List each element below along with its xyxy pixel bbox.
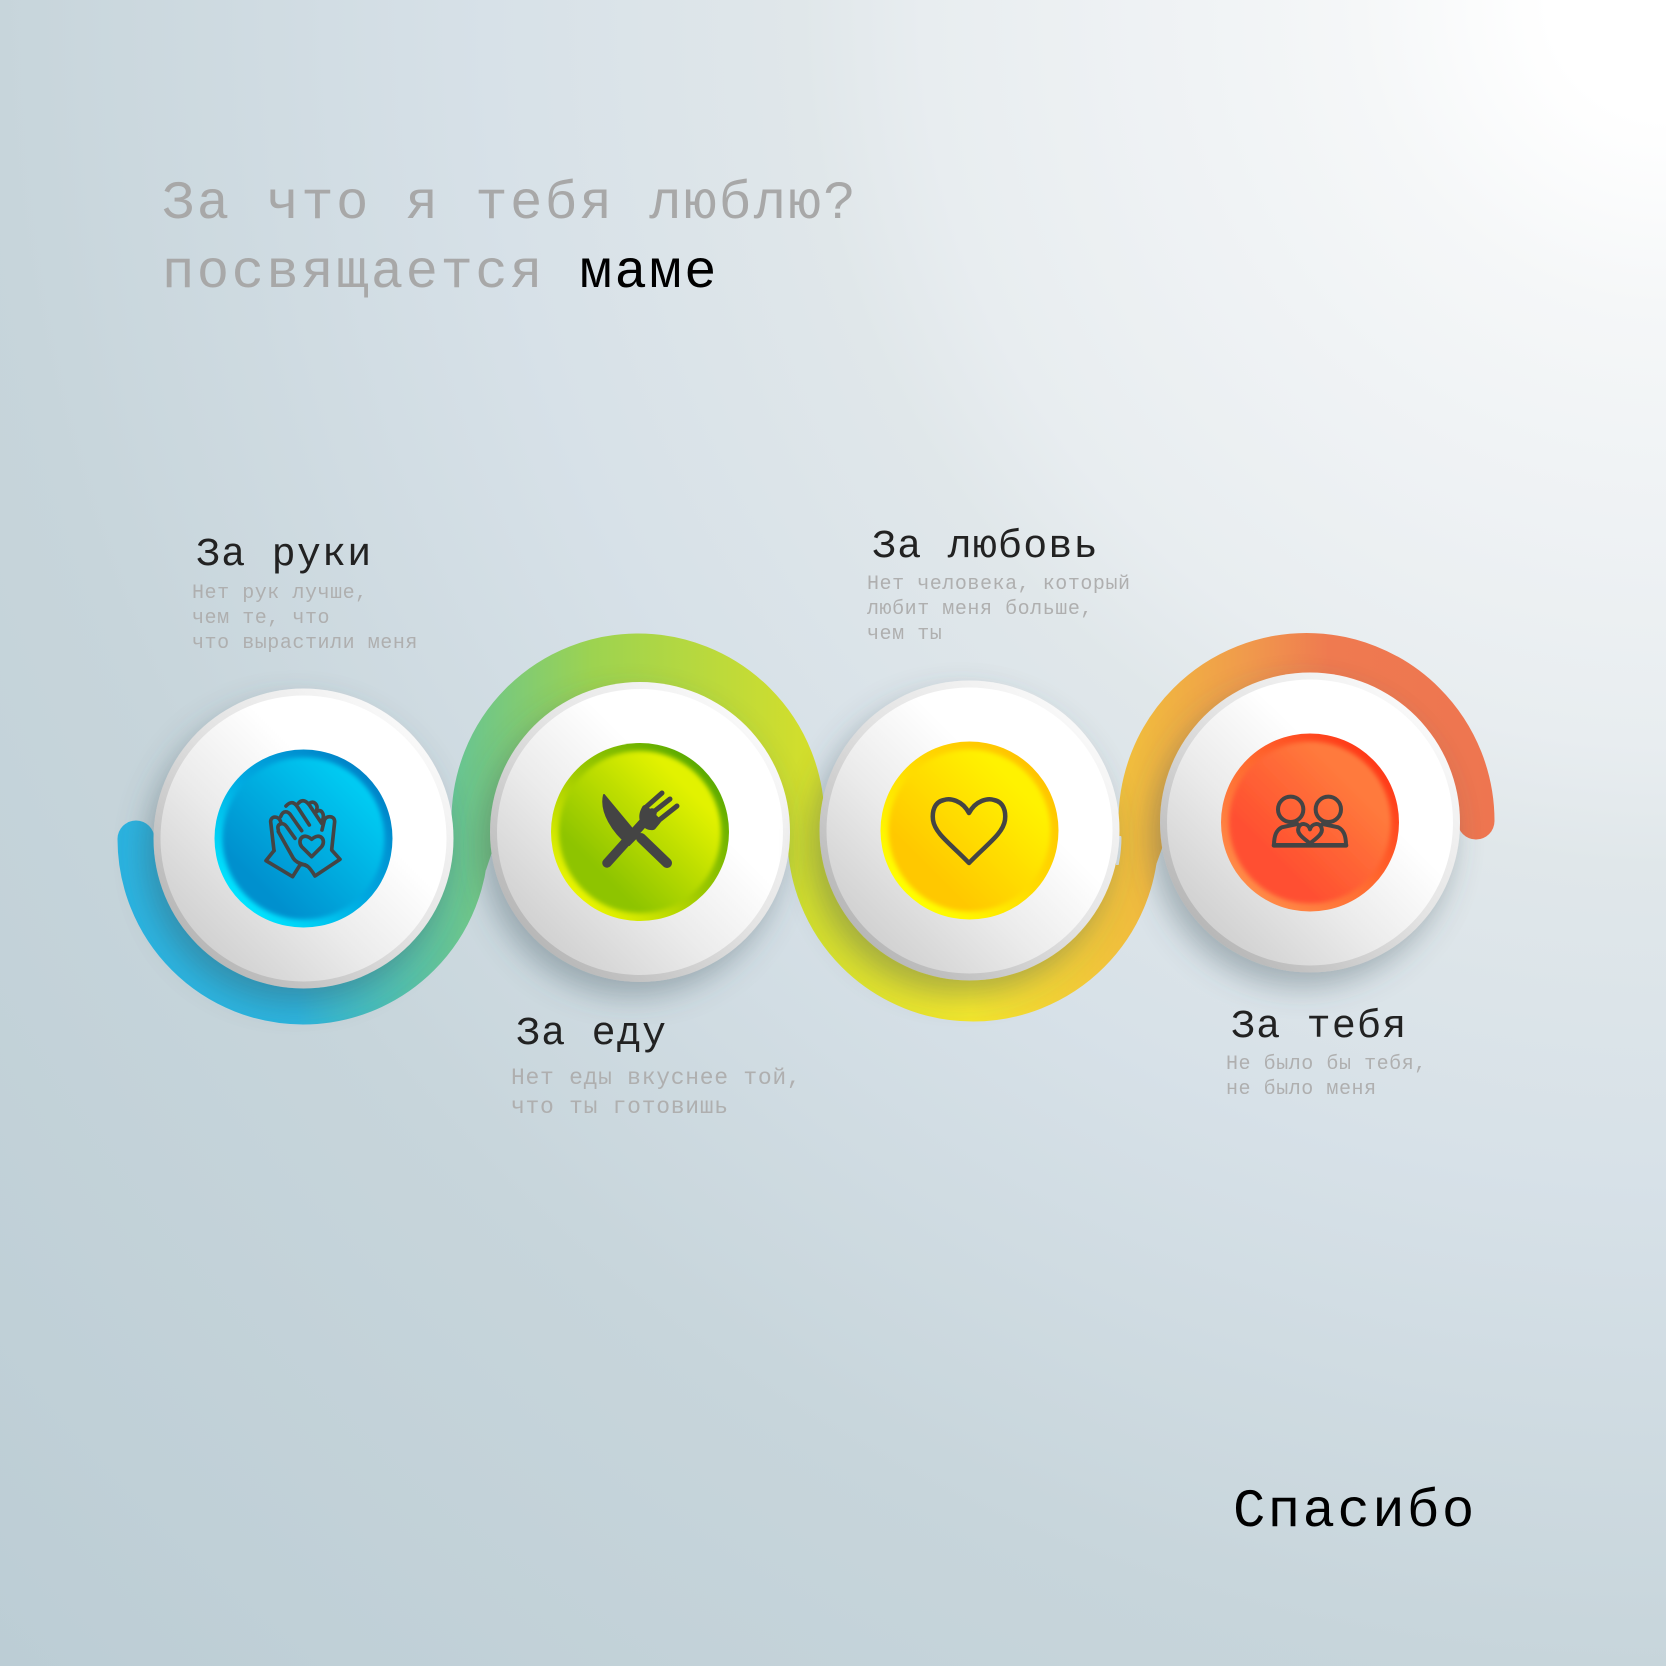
ribbon path [136, 652, 1476, 1006]
step 1: hands button [154, 688, 454, 988]
label: za edu: что ты готовишь [511, 1094, 729, 1120]
label: za ruki: что вырастили меня [192, 632, 418, 655]
icon: couple with heart [1274, 797, 1346, 845]
label: za lyubov [867, 525, 1131, 646]
label: za edu: За еду [516, 1012, 667, 1057]
label: za lyubov: чем ты [867, 623, 942, 646]
icon: hands with heart [266, 801, 340, 877]
label: za ruki: чем те, что [192, 607, 330, 630]
step 3: love button [820, 680, 1120, 980]
label: za tebya: Не было бы тебя, [1226, 1053, 1427, 1076]
label: za tebya: не было меня [1226, 1078, 1377, 1101]
thank you note: Спасибо [1233, 1482, 1477, 1543]
label: za ruki: Нет рук лучше, [192, 582, 368, 605]
icon: heart [933, 799, 1005, 863]
label: za ruki: За руки [196, 533, 372, 578]
step 4: you button [1160, 672, 1460, 972]
step 2: food button [490, 682, 790, 982]
icon: fork and knife [603, 793, 677, 863]
label: za ruki [192, 533, 418, 655]
label: za lyubov: За любовь [872, 525, 1099, 570]
title [162, 174, 858, 304]
label: za edu [511, 1012, 801, 1120]
label: za lyubov: Нет человека, который [867, 573, 1131, 596]
label: za edu: Нет еды вкуснее той, [511, 1065, 801, 1091]
label: za tebya: За тебя [1231, 1005, 1407, 1050]
label: za tebya [1226, 1005, 1427, 1101]
title: За что я тебя люблю? [162, 174, 858, 235]
label: za lyubov: любит меня больше, [867, 598, 1093, 621]
title: посвящается маме [162, 243, 719, 304]
